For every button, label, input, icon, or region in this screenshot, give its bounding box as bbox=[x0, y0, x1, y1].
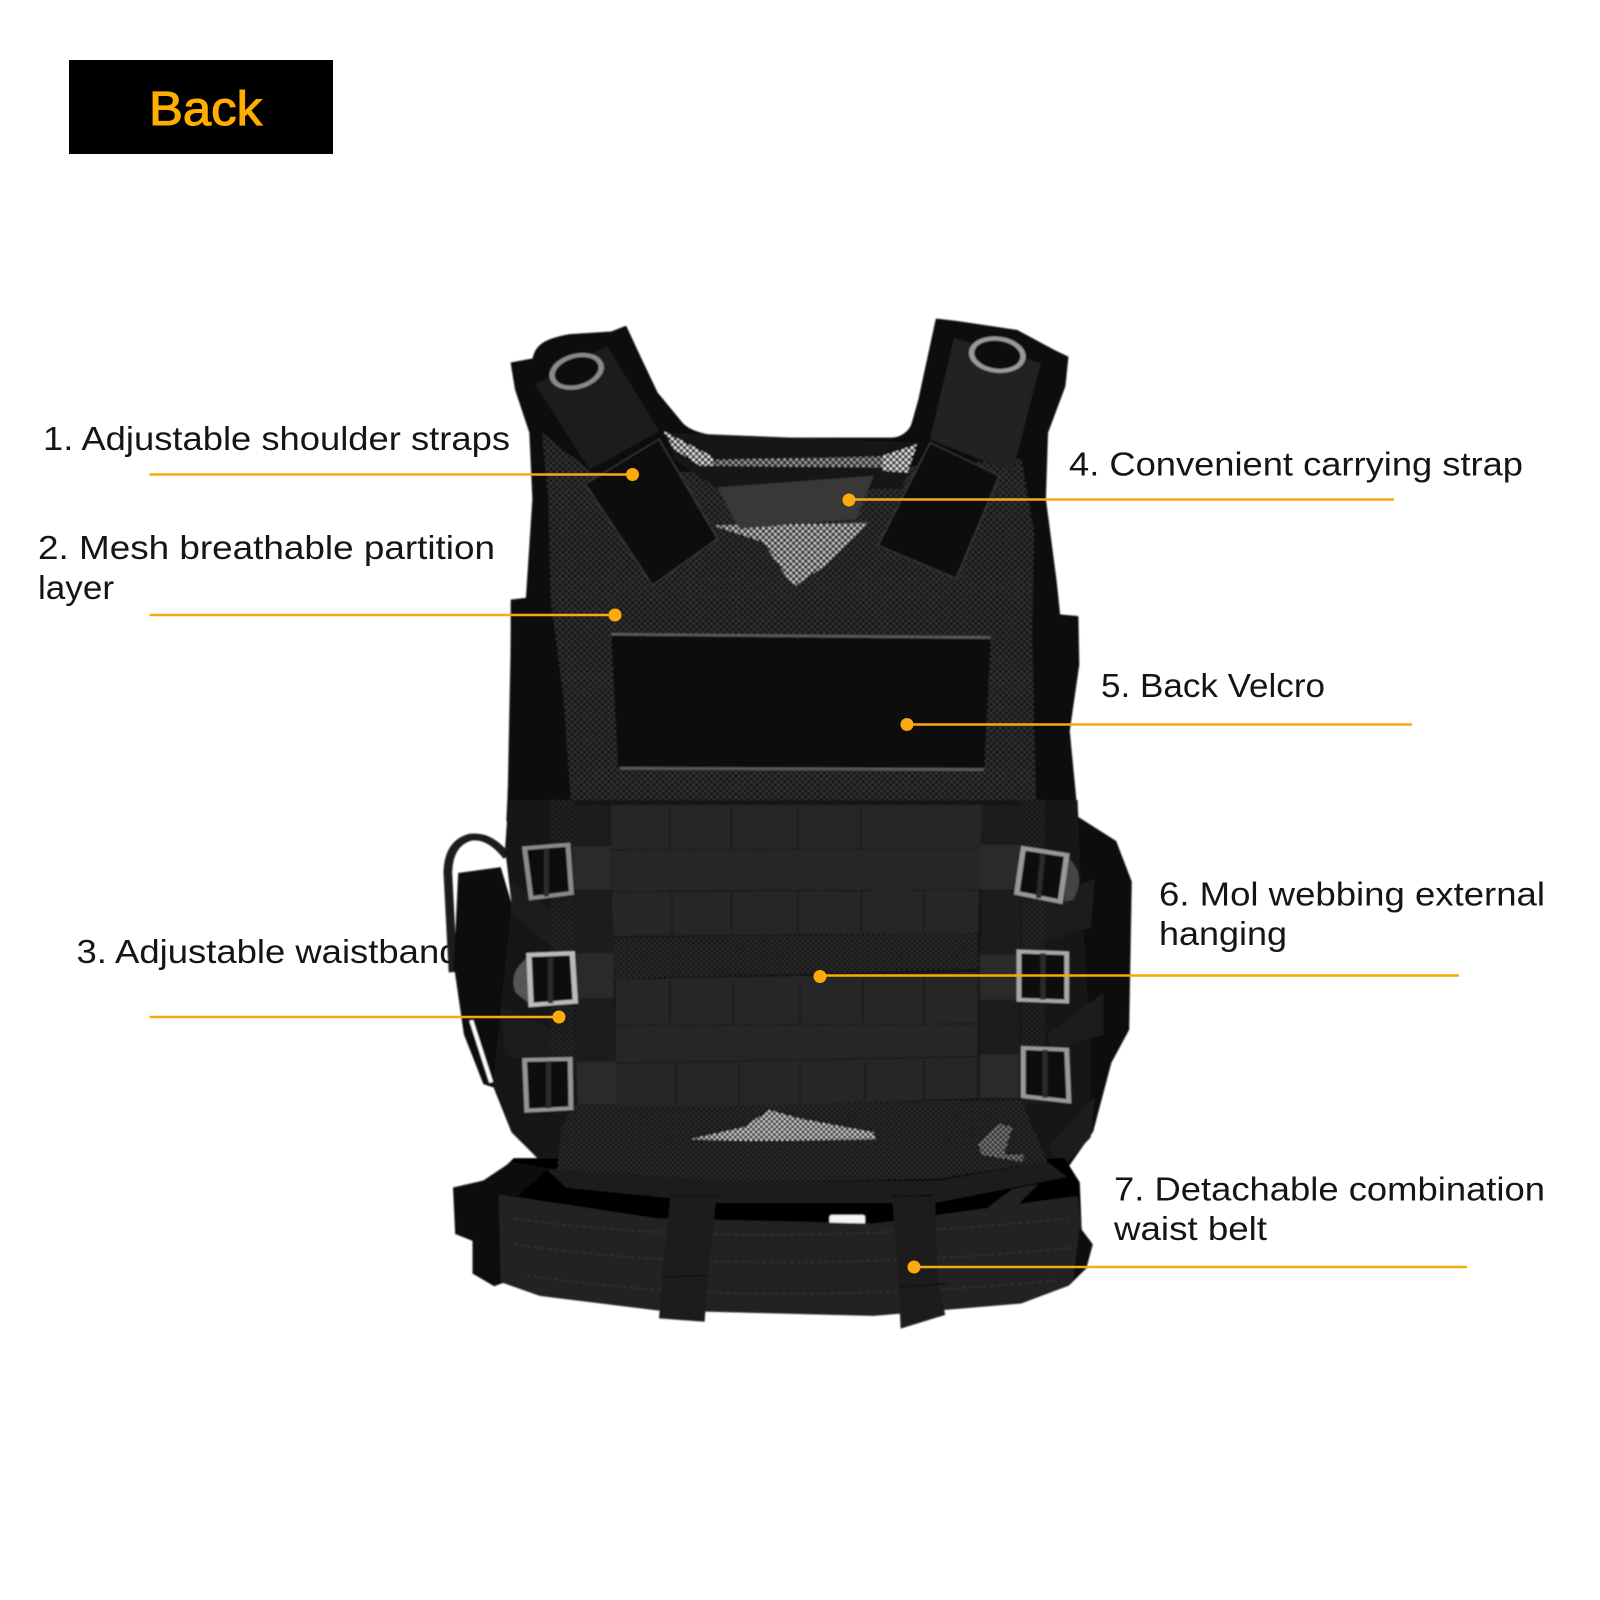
side straps bbox=[501, 879, 1104, 1165]
left buckle middle bbox=[529, 953, 575, 1005]
hem above belt bbox=[546, 1162, 1067, 1203]
side pouch left bbox=[507, 598, 546, 821]
dark band under neck bbox=[666, 433, 917, 489]
label 6: Mol webbing external hanging: 6. Mol webbing external bbox=[1159, 876, 1545, 912]
waist belt bbox=[499, 1194, 1093, 1316]
MOLLE lower webbing block bbox=[616, 972, 978, 1107]
white gap bbox=[829, 1215, 865, 1225]
right belt loop bbox=[891, 1182, 945, 1329]
label 3: Adjustable waistband: 3. Adjustable waistband bbox=[76, 933, 460, 970]
label 6: Mol webbing external hanging: hanging bbox=[1159, 915, 1287, 952]
label 7: Detachable combination waist belt bbox=[1113, 1170, 1545, 1247]
see-through mesh lower bbox=[689, 1110, 876, 1141]
right buckle top disc bbox=[1065, 855, 1079, 902]
label 5: Back Velcro: 5. Back Velcro bbox=[1101, 667, 1325, 704]
button: Back: Back bbox=[149, 83, 263, 136]
MOLLE upper webbing block bbox=[611, 805, 982, 936]
right shoulder pad bbox=[930, 338, 1041, 472]
callout line 2 with dot bbox=[150, 608, 622, 622]
label 4: Convenient carrying strap: 4. Convenient carrying strap bbox=[1069, 446, 1523, 482]
belt stitching bbox=[514, 1218, 1073, 1294]
label 1: Adjustable shoulder straps: 1. Adjustable shoulder straps bbox=[43, 420, 510, 457]
see-through mesh at neck, middle bbox=[715, 457, 882, 467]
webbing seams bbox=[611, 807, 982, 1105]
callout line 1 with dot bbox=[150, 468, 639, 481]
left buckle top bbox=[525, 845, 571, 898]
left buckle bottom bbox=[525, 1059, 571, 1111]
belt loop folds bbox=[662, 1195, 945, 1287]
see-through mesh at neck, left bbox=[663, 431, 715, 466]
label 7: Detachable combination waist belt: waist belt bbox=[1113, 1210, 1267, 1247]
vest upper silhouette bbox=[507, 319, 1078, 821]
illustration: tactical vest, back view bbox=[448, 319, 1132, 1329]
belt end bbox=[1073, 1227, 1093, 1280]
vest upper section: shoulders, mesh and velcro bbox=[507, 319, 1078, 821]
mesh back layer bbox=[542, 433, 1036, 821]
left belt loop bbox=[659, 1182, 718, 1322]
right D-ring bbox=[967, 334, 1028, 375]
callout line 5 with dot bbox=[900, 718, 1412, 731]
left buckle middle disc bbox=[513, 957, 531, 1005]
stitched patches on columns bbox=[572, 845, 1019, 1105]
carrying strap tab bbox=[718, 476, 874, 529]
callout line 4 with dot bbox=[842, 494, 1394, 506]
holster gap bbox=[471, 1020, 491, 1082]
see-through mesh triangle bbox=[713, 523, 867, 587]
left shoulder lower velcro strap bbox=[585, 439, 718, 585]
buckle center bars bbox=[546, 848, 1045, 1108]
label 6: Mol webbing external hanging bbox=[1159, 876, 1545, 952]
label 2: Mesh breathable partition layer bbox=[38, 529, 495, 606]
lower mesh panel bbox=[557, 1100, 1047, 1182]
right buckle bottom bbox=[1023, 1048, 1069, 1101]
right buckle middle bbox=[1019, 952, 1067, 1001]
inner strap behind belt bbox=[973, 1184, 1039, 1218]
see-through mesh at neck, right bbox=[882, 444, 917, 472]
side pouch right bbox=[1045, 615, 1078, 821]
button: Back bbox=[69, 60, 333, 154]
right pouch bbox=[1047, 814, 1132, 1172]
callout line 6 with dot bbox=[814, 970, 1459, 983]
back velcro panel bbox=[611, 635, 991, 768]
label 2: Mesh breathable partition layer: 2. Mesh breathable partition bbox=[38, 529, 495, 566]
label 7: Detachable combination waist belt: 7. Detachable combination bbox=[1114, 1170, 1545, 1208]
label 2: Mesh breathable partition layer: layer bbox=[38, 569, 114, 606]
black gap behind belt bbox=[496, 1158, 1082, 1241]
vest lower section: MOLLE webbing, buckles and belt bbox=[448, 800, 1132, 1329]
callout line 7 with dot bbox=[908, 1260, 1467, 1274]
holster loop bbox=[448, 837, 507, 972]
right edge mesh bbox=[1021, 800, 1045, 1103]
right buckle top bbox=[1017, 848, 1067, 902]
left edge mesh bbox=[551, 800, 574, 1107]
left D-ring bbox=[544, 348, 609, 394]
see-through mesh lower right bbox=[978, 1124, 1025, 1162]
callout line 3 with dot bbox=[150, 1010, 566, 1024]
left webbing column bbox=[572, 805, 616, 1107]
lower body silhouette bbox=[493, 800, 1091, 1165]
central mesh gap bbox=[611, 933, 978, 979]
left shoulder pad bbox=[535, 346, 659, 469]
right shoulder lower velcro strap bbox=[878, 443, 999, 579]
left belt bundle bbox=[453, 1162, 548, 1286]
right webbing column bbox=[980, 805, 1021, 1098]
velcro panel edges bbox=[611, 634, 991, 770]
holster body bbox=[454, 867, 512, 1088]
